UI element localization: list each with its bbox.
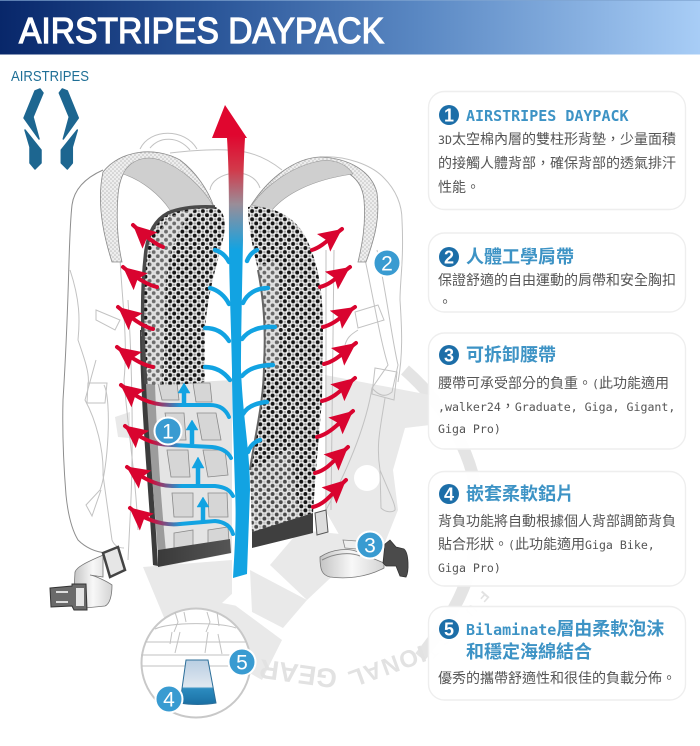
text block: bilaminate description: 優秀的攜帶舒適性和很佳的負載分佈。: [438, 668, 676, 688]
panel: airstripes daypack: 1: [444, 106, 454, 126]
backpack body outline: [63, 133, 403, 560]
header banner: [0, 0, 700, 54]
watermark logo: GEAR: [257, 653, 339, 694]
title: AIRSTRIPES DAYPACK: [19, 10, 384, 51]
watermark logo: [115, 370, 493, 694]
badge 5: 5: [236, 652, 248, 674]
lower left gradient airflow arrows: [121, 385, 233, 534]
panel: flexible aluminium stays: 嵌套柔軟鋁片: [466, 483, 574, 505]
right mesh pad: [248, 207, 323, 532]
panel: flexible aluminium stays: 4: [444, 484, 454, 504]
badge 4: [156, 686, 182, 712]
text block: hip belt description: (此功能適用: [592, 373, 669, 393]
panel: removable hip belt: 3: [444, 346, 454, 366]
right mesh base: [252, 513, 313, 548]
badge 2: [374, 250, 400, 276]
badge 3: [356, 532, 384, 558]
text block: hip belt description: ,walker24: [438, 400, 501, 414]
badge 3: 3: [364, 534, 376, 558]
left shoulder strap: [100, 152, 214, 262]
badge 1: [154, 418, 182, 444]
central airflow arrow: [212, 105, 250, 578]
badge 2: 2: [381, 252, 393, 276]
panel: bilaminate layer: 和穩定海綿結合: [466, 641, 592, 663]
panel: flexible aluminium stays: [428, 472, 686, 586]
icon: foam insert: [180, 660, 216, 704]
inset detail circle: [141, 608, 250, 718]
small upward blue arrows: [178, 383, 209, 522]
panel: airstripes daypack: AIRSTRIPES DAYPACK: [466, 107, 629, 125]
icon: left stripe: [24, 89, 43, 169]
text block: stays description: 貼合形狀。: [438, 534, 508, 554]
panel: bilaminate layer: Bilaminate層由柔軟泡沫: [466, 618, 664, 640]
text block: airstripes description: 3D太空棉內層的雙柱形背墊，少量面積: [438, 129, 676, 149]
panel: ergonomic shoulder straps: 2: [444, 248, 454, 268]
badge 1: 1: [162, 420, 174, 444]
text block: stays description: (此功能適用Giga Bike,: [508, 534, 655, 554]
panel: airstripes daypack: [428, 92, 686, 210]
watermark logo: IONAL: [345, 639, 429, 692]
backpack illustration: [50, 105, 408, 718]
panel: removable hip belt: 可拆卸腰帶: [466, 344, 556, 366]
AIRSTRIPES logo: AIRSTRIPES: [11, 68, 89, 85]
text block: hip belt description: ，Graduate, Giga, Gigant,: [501, 396, 675, 416]
right shoulder strap: [250, 157, 378, 262]
panel: ergonomic shoulder straps: [428, 233, 686, 312]
text block: stays description: 背負功能將自動根據個人背部調節背負: [438, 511, 676, 531]
text block: hip belt description: Giga Pro): [438, 422, 501, 436]
text block: hip belt description: 腰帶可承受部分的負重。: [438, 373, 592, 393]
watermark logo: FUNCT: [424, 588, 493, 662]
panel: ergonomic shoulder straps: 人體工學肩帶: [466, 247, 574, 268]
lower left base: [158, 539, 231, 567]
text block: airstripes description: 性能。: [438, 177, 480, 197]
red arrows left: [117, 225, 163, 367]
right hip belt and buckle: [315, 510, 408, 578]
left hip belt and buckle: [50, 547, 125, 610]
left mesh pad: [141, 206, 225, 385]
panel: removable hip belt: [428, 333, 686, 449]
badge 4: 4: [163, 688, 175, 712]
panel: bilaminate layer: 5: [444, 620, 454, 640]
red arrows right: [312, 229, 356, 507]
badge 5: [228, 648, 256, 676]
text block: airstripes description: 的接觸人體背部，確保背部的透氣排汗: [438, 153, 676, 173]
text block: stays description: Giga Pro): [438, 561, 501, 575]
lower left back pad: [140, 330, 232, 568]
text block: straps description: 。: [438, 292, 452, 312]
panel: bilaminate layer: [428, 606, 686, 700]
text block: straps description: 保證舒適的自由運動的肩帶和安全胸扣: [438, 270, 676, 290]
blue branch air channels: [205, 250, 275, 452]
icon: right stripe: [59, 89, 78, 169]
AIRSTRIPES logo: [11, 68, 89, 169]
